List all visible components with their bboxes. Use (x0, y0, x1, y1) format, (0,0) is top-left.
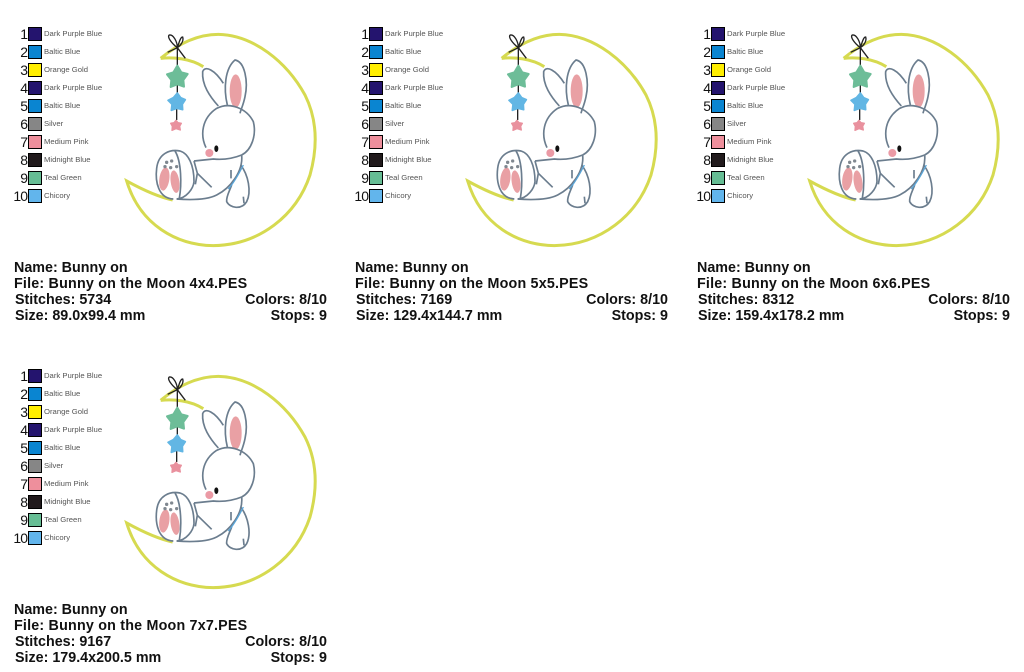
design details: File: Bunny on the Moon 5x5.PES (355, 276, 588, 292)
legend: thread colours: 3 (20, 404, 27, 420)
legend: thread colours: 1 (20, 26, 27, 42)
design details: Size: 89.0x99.4 mm (15, 308, 145, 324)
legend: thread colours: 5 (703, 98, 710, 114)
illustration: bunny on crescent moon (465, 32, 658, 248)
legend: thread colours (13, 368, 102, 546)
legend: thread colours: 6 (20, 458, 27, 474)
legend: thread colours: 4 (20, 422, 27, 438)
legend: thread colours: 7 (361, 134, 368, 150)
legend: thread colours: Dark Purple Blue (727, 83, 785, 92)
legend: thread colours: 8 (361, 152, 368, 168)
design details: Name: Bunny on (14, 602, 128, 618)
legend: thread colours: Dark Purple Blue (385, 29, 443, 38)
design details: Stops: 9 (954, 308, 1010, 324)
design details: File: Bunny on the Moon 7x7.PES (14, 618, 247, 634)
legend: thread colours: Baltic Blue (44, 101, 80, 110)
legend: thread colours: 6 (20, 116, 27, 132)
legend: thread colours: 3 (20, 62, 27, 78)
legend: thread colours: Orange Gold (385, 65, 429, 74)
legend: thread colours: Dark Purple Blue (727, 29, 785, 38)
legend: thread colours: Silver (727, 119, 746, 128)
legend: thread colours: Dark Purple Blue (44, 371, 102, 380)
legend: thread colours: Dark Purple Blue (385, 83, 443, 92)
panel: Bunny on the Moon 6x6 (696, 26, 1010, 324)
design details: Stitches: 5734 (15, 292, 111, 308)
legend: thread colours: 9 (703, 170, 710, 186)
legend: thread colours: 7 (703, 134, 710, 150)
legend: thread colours: Dark Purple Blue (44, 29, 102, 38)
legend: thread colours: 7 (20, 476, 27, 492)
illustration: bunny on crescent moon (124, 374, 317, 590)
legend: thread colours: 3 (703, 62, 710, 78)
legend: thread colours: 2 (703, 44, 710, 60)
legend: thread colours: Chicory (44, 191, 70, 200)
legend: thread colours: Baltic Blue (44, 389, 80, 398)
legend: thread colours (696, 26, 785, 204)
design details: Size: 179.4x200.5 mm (15, 650, 161, 666)
design details: Size: 159.4x178.2 mm (698, 308, 844, 324)
legend: thread colours: Medium Pink (44, 479, 88, 488)
legend: thread colours: 1 (703, 26, 710, 42)
legend: thread colours: Teal Green (44, 515, 82, 524)
legend: thread colours: Midnight Blue (727, 155, 774, 164)
legend: thread colours: Baltic Blue (44, 443, 80, 452)
legend: thread colours: 7 (20, 134, 27, 150)
panel: Bunny on the Moon 7x7 (13, 368, 327, 666)
legend: thread colours: 1 (20, 368, 27, 384)
design details: Stitches: 9167 (15, 634, 111, 650)
legend: thread colours: Dark Purple Blue (44, 83, 102, 92)
legend: thread colours: Baltic Blue (44, 47, 80, 56)
legend: thread colours (354, 26, 443, 204)
legend: thread colours: 9 (361, 170, 368, 186)
panel: Bunny on the Moon 5x5 (354, 26, 668, 324)
legend: thread colours: 4 (703, 80, 710, 96)
legend: thread colours: 6 (703, 116, 710, 132)
legend: thread colours: 9 (20, 512, 27, 528)
illustration: bunny on crescent moon (807, 32, 1000, 248)
legend: thread colours: 8 (20, 152, 27, 168)
design details (697, 260, 1010, 324)
legend: thread colours: 10 (13, 188, 27, 204)
design details: Colors: 8/10 (245, 634, 327, 650)
legend: thread colours: 4 (361, 80, 368, 96)
legend: thread colours: 3 (361, 62, 368, 78)
legend: thread colours: 10 (13, 530, 27, 546)
legend: thread colours: Orange Gold (44, 407, 88, 416)
design details: File: Bunny on the Moon 4x4.PES (14, 276, 247, 292)
design details: Stops: 9 (612, 308, 668, 324)
legend: thread colours: Chicory (44, 533, 70, 542)
legend: thread colours: 5 (20, 440, 27, 456)
legend: thread colours: Medium Pink (385, 137, 429, 146)
legend: thread colours: Midnight Blue (44, 155, 91, 164)
legend: thread colours: Teal Green (727, 173, 765, 182)
legend: thread colours: Midnight Blue (44, 497, 91, 506)
illustration: bunny on crescent moon (124, 32, 317, 248)
legend: thread colours: 2 (20, 44, 27, 60)
design details (355, 260, 668, 324)
legend: thread colours: 2 (20, 386, 27, 402)
legend: thread colours: 10 (696, 188, 710, 204)
design details (14, 602, 327, 666)
design details: File: Bunny on the Moon 6x6.PES (697, 276, 930, 292)
design details: Name: Bunny on (14, 260, 128, 276)
legend: thread colours: 8 (20, 494, 27, 510)
legend: thread colours: 8 (703, 152, 710, 168)
legend: thread colours: Chicory (727, 191, 753, 200)
legend: thread colours: Silver (44, 461, 63, 470)
legend: thread colours: Baltic Blue (385, 47, 421, 56)
legend: thread colours: 5 (20, 98, 27, 114)
legend: thread colours: Baltic Blue (727, 47, 763, 56)
design details: Size: 129.4x144.7 mm (356, 308, 502, 324)
legend: thread colours: 2 (361, 44, 368, 60)
design details: Stops: 9 (271, 650, 327, 666)
design details: Stitches: 7169 (356, 292, 452, 308)
legend: thread colours: Orange Gold (44, 65, 88, 74)
design details: Stops: 9 (271, 308, 327, 324)
legend: thread colours: Chicory (385, 191, 411, 200)
legend: thread colours: Baltic Blue (727, 101, 763, 110)
legend: thread colours: Midnight Blue (385, 155, 432, 164)
legend: thread colours: Silver (385, 119, 404, 128)
legend: thread colours: 6 (361, 116, 368, 132)
design details: Name: Bunny on (697, 260, 811, 276)
design details: Colors: 8/10 (245, 292, 327, 308)
design details: Colors: 8/10 (928, 292, 1010, 308)
legend: thread colours: Dark Purple Blue (44, 425, 102, 434)
legend: thread colours (13, 26, 102, 204)
design details: Name: Bunny on (355, 260, 469, 276)
legend: thread colours: Orange Gold (727, 65, 771, 74)
legend: thread colours: Teal Green (44, 173, 82, 182)
legend: thread colours: Medium Pink (727, 137, 771, 146)
design details (14, 260, 327, 324)
legend: thread colours: 1 (361, 26, 368, 42)
legend: thread colours: Medium Pink (44, 137, 88, 146)
legend: thread colours: 10 (354, 188, 368, 204)
legend: thread colours: 9 (20, 170, 27, 186)
legend: thread colours: Baltic Blue (385, 101, 421, 110)
legend: thread colours: 4 (20, 80, 27, 96)
legend: thread colours: 5 (361, 98, 368, 114)
design details: Stitches: 8312 (698, 292, 794, 308)
design details: Colors: 8/10 (586, 292, 668, 308)
legend: thread colours: Silver (44, 119, 63, 128)
legend: thread colours: Teal Green (385, 173, 423, 182)
panel: Bunny on the Moon 4x4 (13, 26, 327, 324)
